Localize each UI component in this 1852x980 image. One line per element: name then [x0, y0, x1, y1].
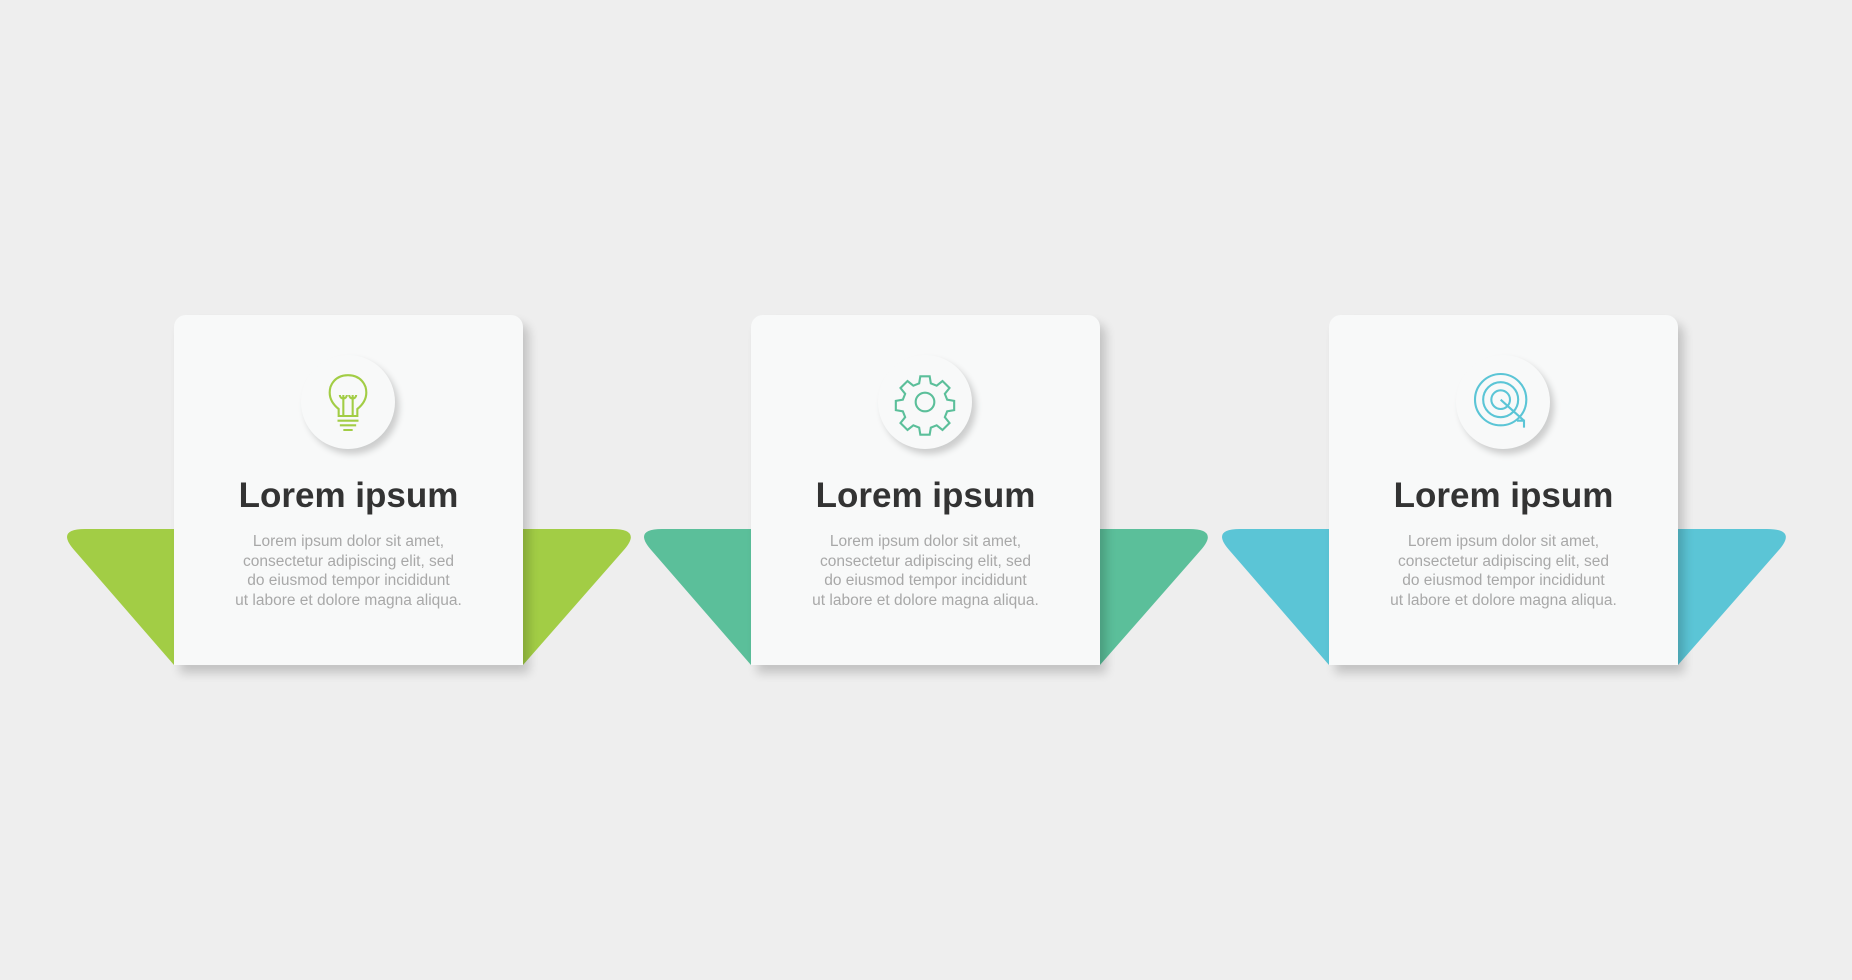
card 3 [1329, 315, 1678, 665]
body text: consectetur adipiscing elit, sed [1398, 552, 1609, 570]
body text: do eiusmod tempor incididunt [824, 572, 1027, 589]
body text: do eiusmod tempor incididunt [247, 572, 450, 589]
icon: light bulb [301, 355, 395, 449]
title: Lorem ipsum [816, 476, 1035, 515]
body text: Lorem ipsum dolor sit amet, [1408, 533, 1599, 550]
card 1 [174, 315, 523, 665]
band: cyan [1222, 529, 1786, 665]
body text: consectetur adipiscing elit, sed [243, 552, 454, 570]
band: teal [644, 529, 1208, 665]
body text [1390, 533, 1617, 608]
icon: target [1456, 355, 1550, 449]
body text: ut labore et dolore magna aliqua. [1390, 592, 1617, 608]
body text: Lorem ipsum dolor sit amet, [830, 533, 1021, 550]
body text [235, 533, 462, 608]
title: Lorem ipsum [239, 476, 458, 515]
body text: Lorem ipsum dolor sit amet, [253, 533, 444, 550]
body text [812, 533, 1039, 608]
icon: gear [878, 355, 972, 449]
title: Lorem ipsum [1394, 476, 1613, 515]
card 2 [751, 315, 1100, 665]
body text: ut labore et dolore magna aliqua. [235, 592, 462, 608]
body text: ut labore et dolore magna aliqua. [812, 592, 1039, 608]
body text: consectetur adipiscing elit, sed [820, 552, 1031, 570]
body text: do eiusmod tempor incididunt [1402, 572, 1605, 589]
band: green [67, 529, 631, 665]
